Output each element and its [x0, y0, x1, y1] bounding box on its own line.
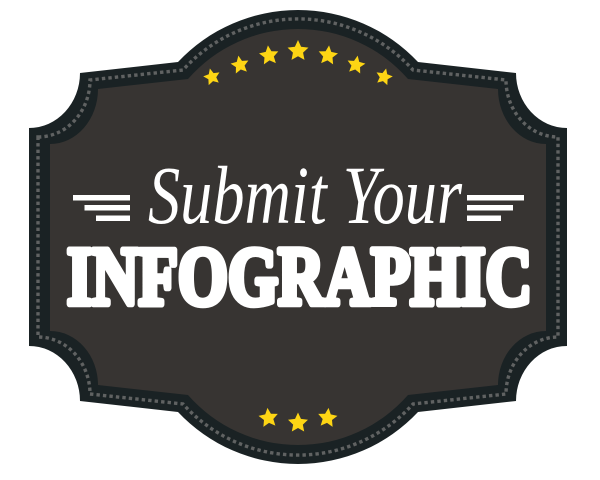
dotted border line	[38, 19, 558, 455]
bottom stars	[258, 407, 338, 432]
left decorative lines	[73, 195, 130, 221]
top star arc	[202, 40, 394, 86]
badge inner panel	[50, 29, 546, 445]
heading: Submit Your: Submit Your	[148, 149, 463, 241]
right decorative lines	[467, 195, 524, 221]
